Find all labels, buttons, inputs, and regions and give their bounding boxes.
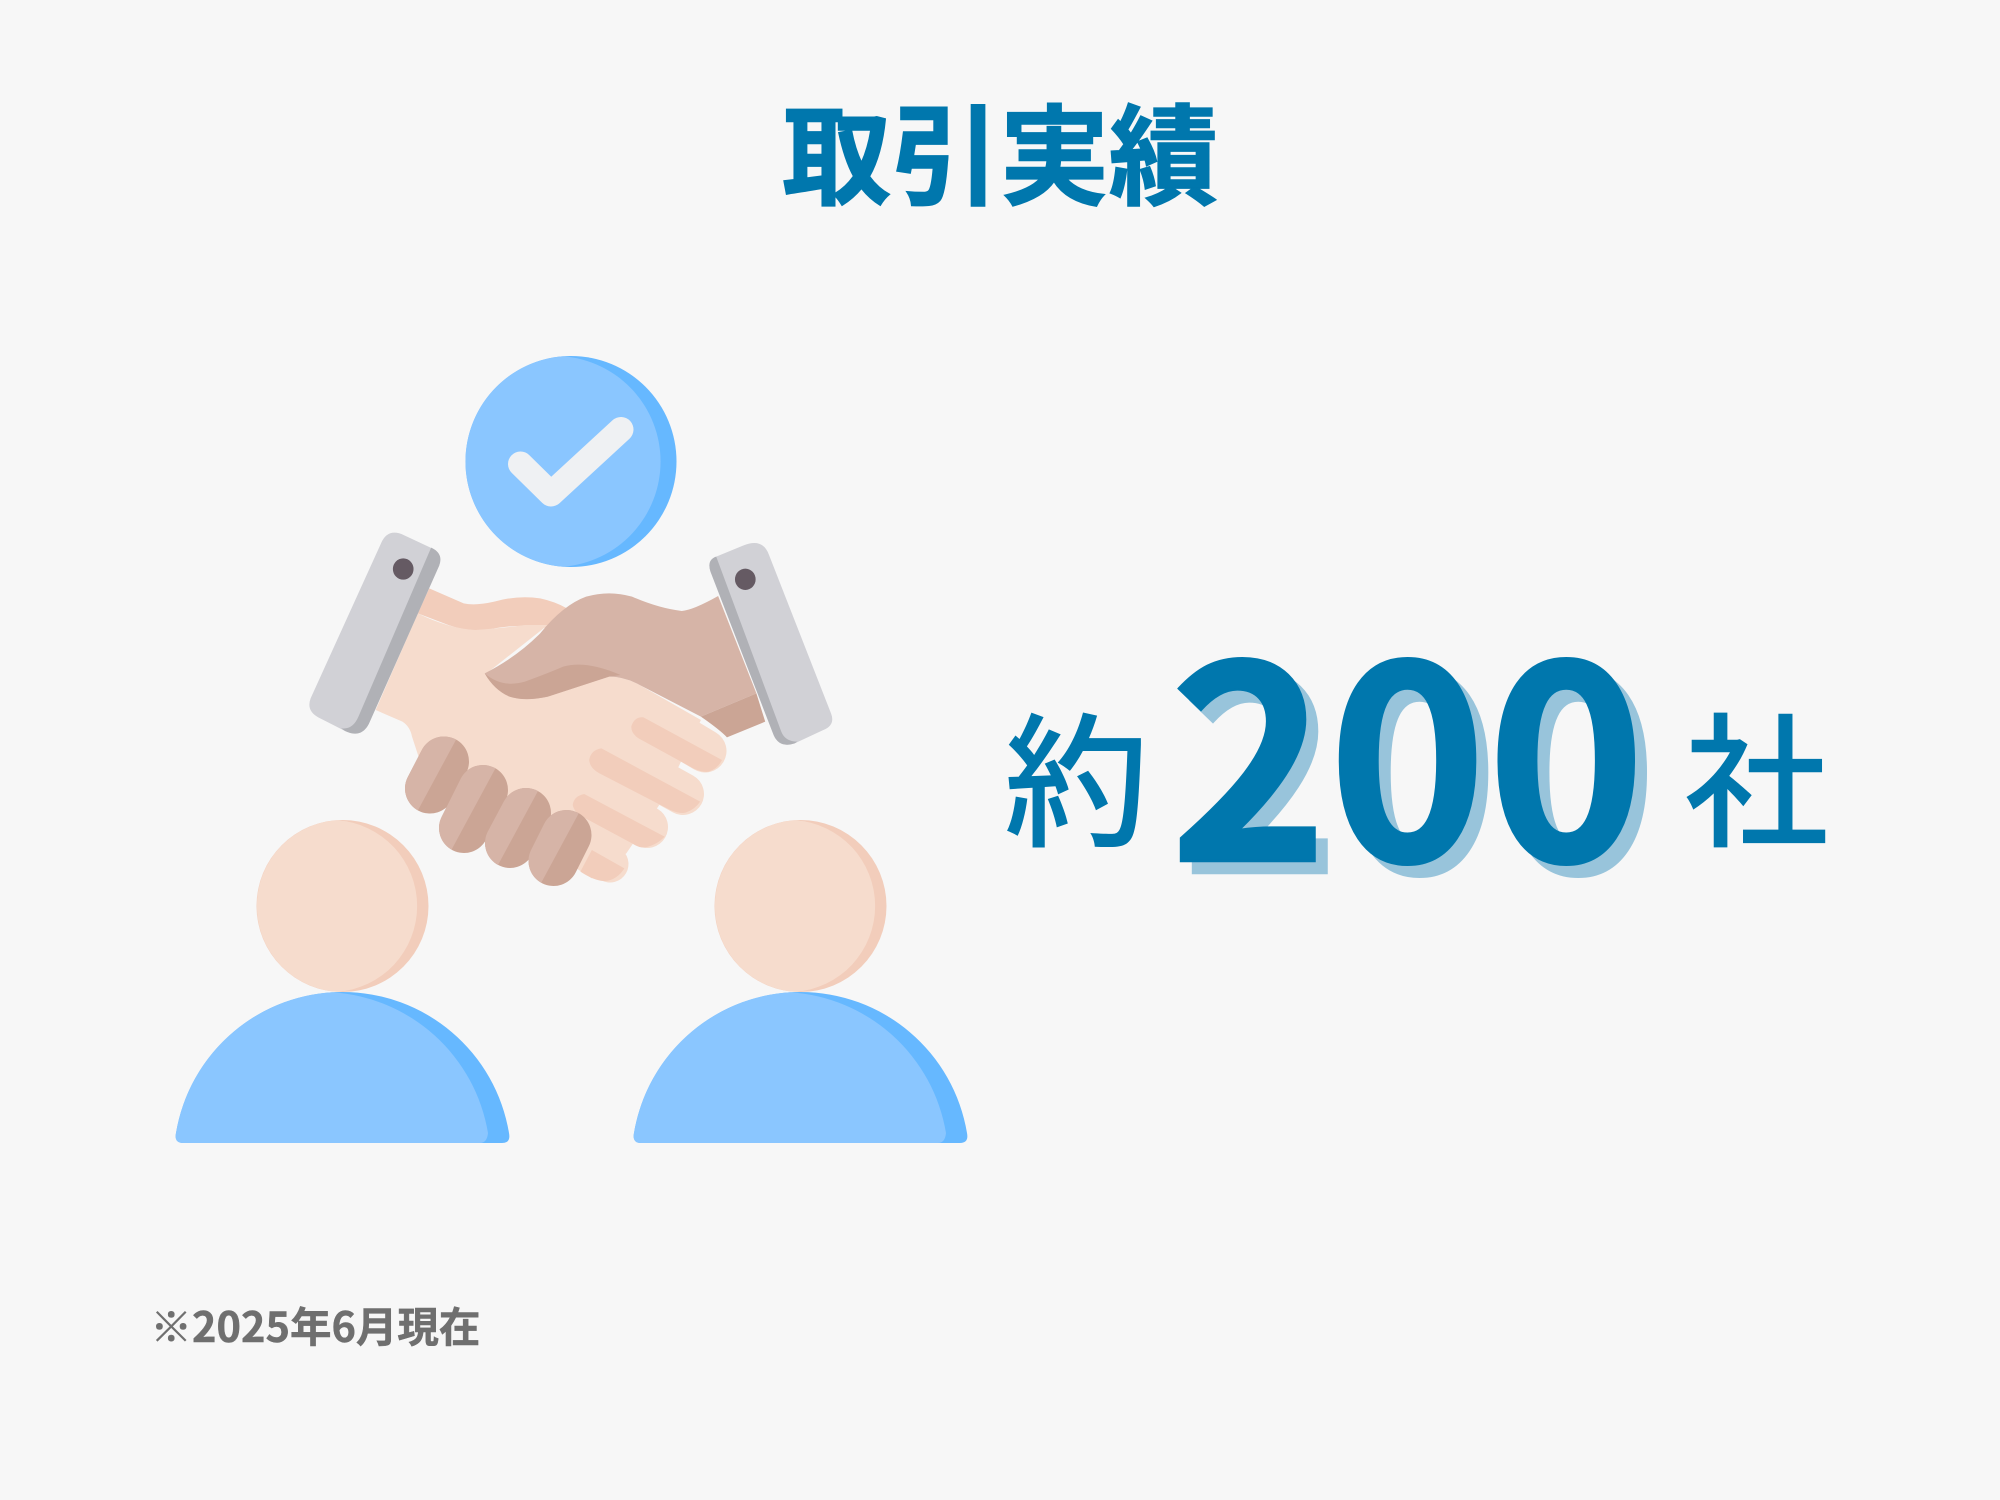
big number 200: 200 <box>1170 550 1646 939</box>
title: 取引実績 <box>782 71 1218 228</box>
text: suffix 社: 社 <box>1684 667 1829 877</box>
text: prefix 約: 約 <box>1004 667 1149 877</box>
footnote: ※2025年6月現在 <box>150 1294 480 1354</box>
icon: left person <box>176 820 509 1143</box>
big number shadow: 200 <box>1182 562 1658 951</box>
icon: handshake <box>309 533 832 881</box>
icon: right person <box>634 820 967 1143</box>
icon: check badge <box>465 356 676 567</box>
